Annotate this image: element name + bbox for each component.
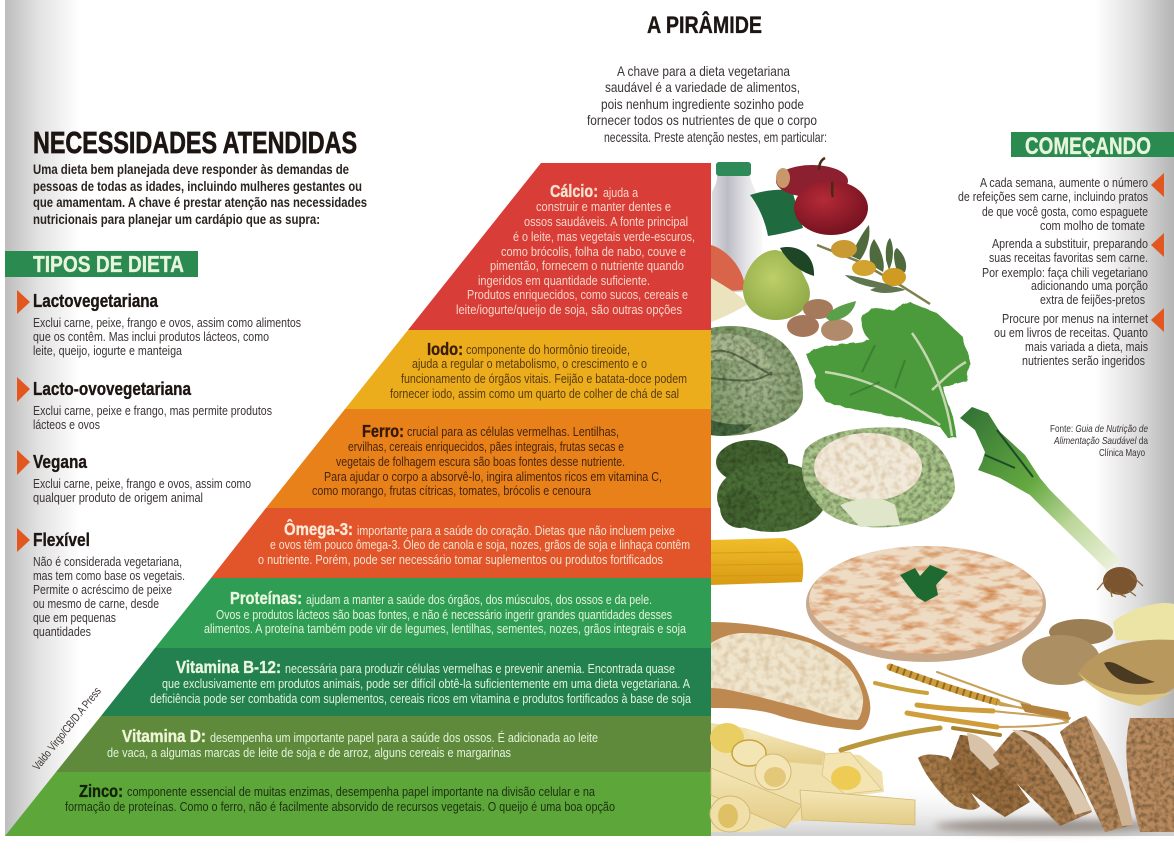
band: Iodo: componente do hormônio tireoide, — [466, 342, 630, 357]
band: Ômega-3 — [211, 508, 711, 578]
intro text block: saudável é a variedade de alimentos, — [605, 79, 800, 95]
banner: Tipos de dieta: TIPOS DE DIETA — [33, 251, 184, 277]
icon: walnuts — [787, 299, 856, 341]
tip: aprenda a substituir: extra de feijões-pretos — [1040, 292, 1145, 307]
tip: procure por menus: Procure por menus na internet — [1002, 311, 1148, 326]
icon: tortilla with parsley — [806, 546, 1046, 662]
tip: procure por menus: mais variada a dieta, mais — [1025, 339, 1148, 354]
band: Vitamina B-12: Vitamina B-12: — [176, 657, 281, 677]
tip: procure por menus: nutrientes serão ingeridos — [1022, 353, 1145, 368]
band: Cálcio: Produtos enriquecidos, como sucos, cereais e — [467, 287, 688, 302]
intro paragraph: necessidades: nutricionais para planejar um cardápio que as supra: — [33, 211, 320, 227]
band: Ferro: ervilhas, cereais enriquecidos, pães integrais, frutas secas e — [348, 439, 624, 454]
band: Ferro: vegetais de folhagem escura são boas fontes desse nutriente. — [336, 454, 625, 469]
panel: Lactovegetariana: que os contêm. Mas inclui produtos lácteos, como — [33, 329, 269, 344]
icon: potatoes — [1022, 603, 1174, 706]
intro text block: A chave para a dieta vegetariana — [617, 63, 790, 79]
band: Ômega-3: importante para a saúde do coração. Dietas que não incluem peixe — [357, 523, 675, 538]
band: Ômega-3: o nutriente. Porém, pode ser necessário tomar suplementos ou produtos fortificados — [258, 552, 663, 567]
band: Vitamina B-12: necessária para produzir células vermelhas e prevenir anemia. Encontrada quase — [285, 661, 675, 676]
icon: slice of bread — [711, 622, 870, 730]
band: Vitamina D: de vaca, a algumas marcas de leite de soja e de arroz, alguns cereais e margarinas — [107, 745, 511, 760]
tip: aprenda a substituir: adicionando uma porção — [1031, 278, 1148, 293]
icon: wheat stalks — [841, 667, 1070, 750]
band: Ferro — [266, 409, 711, 508]
band: Iodo: funcionamento de órgãos vitais. Feijão e batata-doce podem — [401, 371, 687, 386]
photo credit: Valdo Virgo/CB/D.A Press — [31, 685, 104, 773]
band: Proteínas: alimentos. A proteína também pode vir de legumes, lentilhas, sementes, nozes, grãos integrais e soja — [204, 621, 687, 636]
band: Ômega-3: e ovos têm pouco ômega-3. Óleo de canola e soja, nozes, grãos de soja e linhaça contêm — [270, 537, 690, 552]
band: Iodo: Iodo: — [427, 339, 463, 359]
band: Ômega-3: Ômega-3: — [284, 518, 353, 539]
band: Cálcio: ossos saudáveis. A fonte principal — [524, 214, 688, 229]
band: Vitamina D: Vitamina D: — [122, 726, 206, 746]
intro text block: pois nenhum ingrediente sozinho pode — [601, 96, 804, 112]
panel: Lacto-ovovegetariana — [17, 377, 272, 432]
intro paragraph: necessidades: pessoas de todas as idades, incluindo mulheres gestantes ou — [33, 178, 362, 194]
tip: aumente refeições sem carne — [958, 173, 1164, 233]
panel: Flexível — [17, 528, 185, 639]
band: Vitamina B-12 — [101, 648, 711, 716]
icon: chard leaf — [805, 302, 970, 438]
icon: apples — [750, 158, 868, 236]
intro paragraph: necessidades: Uma dieta bem planejada deve responder às demandas de — [33, 161, 349, 177]
band: Cálcio: ingeridos em quantidade suficiente. — [478, 273, 650, 288]
icon: sliced bread — [918, 716, 1174, 833]
source note: Fonte: Guia de Nutrição de — [1050, 423, 1148, 435]
icon: broccoli — [716, 440, 827, 532]
intro paragraph: necessidades: que amamentam. A chave é prestar atenção nas necessidades — [33, 194, 367, 210]
panel: Flexível: Permite o acréscimo de peixe — [33, 582, 172, 597]
band: Proteínas: ajudam a manter a saúde dos órgãos, dos músculos, dos ossos e da pele. — [306, 592, 652, 607]
band: Proteínas — [155, 578, 711, 648]
panel: Flexível: ou mesmo de carne, desde — [33, 596, 159, 611]
band: Cálcio: pimentão, fornecem o nutriente quando — [490, 258, 684, 273]
band: Vitamina D — [56, 716, 711, 772]
title: A Pirâmide: A PIRÂMIDE — [647, 11, 762, 39]
panel: Lactovegetariana: Lactovegetariana — [33, 291, 159, 311]
icon: olive branch — [817, 225, 930, 304]
band: Cálcio: é o leite, mas vegetais verde-escuros, — [513, 229, 695, 244]
band: Cálcio: ajuda a — [603, 185, 639, 200]
band: Iodo: ajuda a regular o metabolismo, o crescimento e o — [412, 356, 647, 371]
panel: Flexível: que em pequenas — [33, 610, 116, 625]
panel: Lactovegetariana — [17, 290, 301, 358]
band: Ferro: crucial para as células vermelhas. Lentilhas, — [407, 424, 619, 439]
band: Vitamina D: desempenha um importante papel para a saúde dos ossos. É adicionada ao leite — [210, 730, 598, 745]
band: Cálcio: Cálcio: — [550, 181, 598, 201]
panel: Flexível: Flexível — [33, 530, 90, 550]
panel: Lacto-ovovegetariana: Lacto-ovovegetariana — [33, 379, 192, 399]
source note — [1050, 423, 1148, 459]
band: Proteínas: Ovos e produtos lácteos são boas fontes, e não é necessário ingerir grandes quantidades desses — [216, 607, 672, 622]
panel: Vegana: Vegana — [33, 452, 88, 472]
panel: Lactovegetariana: Exclui carne, peixe, frango e ovos, assim como alimentos — [33, 315, 301, 330]
icon: pasta — [710, 723, 915, 832]
band: Zinco: formação de proteínas. Como o ferro, não é facilmente absorvido de recursos vegetais. O queijo é uma boa opção — [65, 799, 615, 814]
icon: cabbage — [711, 326, 803, 436]
band: Iodo: fornecer iodo, assim como um quarto de colher de chá de sal — [390, 386, 679, 401]
intro text block: fornecer todos os nutrientes de que o corpo — [587, 112, 817, 128]
panel: Lactovegetariana: leite, queijo, iogurte e manteiga — [33, 343, 183, 358]
intro text block: necessita. Preste atenção nestes, em particular: — [604, 129, 827, 145]
icon: pear with sliced fruit — [711, 245, 814, 322]
panel: Flexível: quantidades — [33, 624, 91, 639]
icon: cauliflower — [802, 427, 955, 528]
band: Iodo — [345, 330, 711, 409]
band: Zinco: Zinco: — [79, 781, 123, 801]
band: Cálcio: construir e manter dentes e — [536, 199, 671, 214]
tip: procure por menus — [994, 308, 1164, 368]
source note: Clínica Mayo — [1099, 447, 1145, 459]
panel: Vegana: qualquer produto de origem animal — [33, 490, 203, 505]
tip: aprenda a substituir — [982, 233, 1164, 307]
heading: Necessidades atendidas: NECESSIDADES ATENDIDAS — [33, 125, 357, 160]
band: Ferro: Para ajudar o corpo a absorvê-lo, ingira alimentos ricos em vitamina C, — [324, 469, 662, 484]
intro paragraph: necessidades — [33, 161, 367, 227]
band: Zinco — [5, 772, 711, 836]
band: Ferro: Ferro: — [362, 421, 404, 441]
band: Cálcio — [408, 163, 711, 330]
band: Zinco: componente essencial de muitas enzimas, desempenha papel importante na divisão celular e na — [127, 784, 596, 799]
source note: Alimentação Saudável da — [1053, 435, 1148, 447]
panel: Flexível: mas tem como base os vegetais. — [33, 568, 185, 583]
illustration: food photos column — [710, 158, 1174, 833]
band: Ferro: como morango, frutas cítricas, tomates, brócolis e cenoura — [312, 483, 592, 498]
band: Cálcio: como brócolis, folha de nabo, couve e — [501, 244, 686, 259]
tip: aumente refeições sem carne: com molho de tomate — [1040, 218, 1145, 233]
chart: nutrient pyramid — [5, 163, 711, 836]
intro text block — [587, 63, 827, 145]
panel: Flexível: Não é considerada vegetariana, — [33, 554, 182, 569]
icon: milk bottle — [712, 162, 763, 292]
icon: corn cob — [711, 538, 803, 585]
panel: Vegana — [17, 450, 251, 505]
band: Vitamina B-12: que exclusivamente em produtos animais, pode ser difícil obtê-la suficientemente em uma dieta vegetariana. A — [162, 676, 690, 691]
band: Cálcio: leite/iogurte/queijo de soja, são outras opções — [456, 302, 682, 317]
band: Vitamina B-12: deficiência pode ser combatida com suplementos, cereais ricos em vitamina e produtos fortificados à base de soja — [150, 691, 692, 706]
panel: Lacto-ovovegetariana: lácteos e ovos — [33, 417, 100, 432]
panel: Vegana: Exclui carne, peixe, frango e ovos, assim como — [33, 476, 251, 491]
panel: Lacto-ovovegetariana: Exclui carne, peixe e frango, mas permite produtos — [33, 403, 272, 418]
band: Proteínas: Proteínas: — [230, 588, 302, 608]
icon: leek — [960, 407, 1143, 597]
